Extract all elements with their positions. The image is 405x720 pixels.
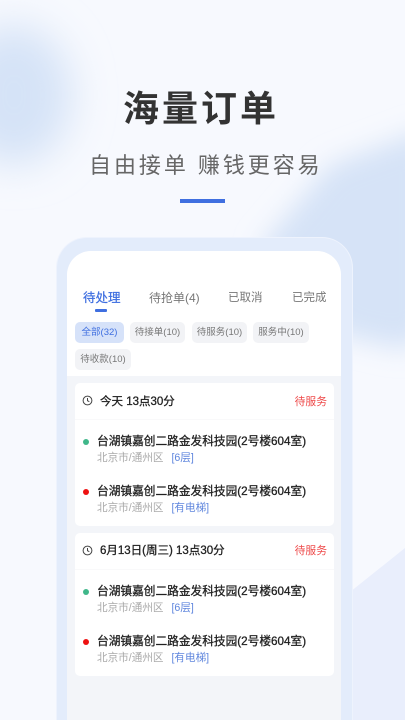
status: 待服务	[295, 545, 327, 557]
address 1: 北京市/通州区 [6层]	[97, 452, 194, 464]
address 2: 北京市/通州区 [有电梯]	[97, 502, 209, 514]
phone screen	[67, 251, 341, 720]
filter chip: all: 全部(32)	[82, 327, 117, 338]
status: 待服务	[295, 396, 327, 408]
filter chip: to serve	[192, 322, 247, 343]
subtitle: 自由接单 赚钱更容易	[89, 153, 323, 178]
clock icon	[82, 546, 92, 556]
filter chip: to accept	[130, 322, 185, 343]
header panel with tabs and filters	[67, 251, 341, 376]
phone frame	[57, 238, 352, 720]
tab: completed: 已完成	[292, 292, 326, 304]
address 2	[83, 484, 306, 514]
filter chip: in service: 服务中(10)	[258, 327, 304, 338]
filter chip: in service	[253, 322, 309, 343]
date and time: 今天 13点30分	[100, 396, 175, 408]
address 2: 北京市/通州区 [有电梯]	[97, 652, 209, 664]
address 2	[83, 634, 306, 664]
date and time: 6月13日(周三) 13点30分	[100, 545, 225, 557]
address 2: 台湖镇嘉创二路金发科技园(2号楼604室)	[97, 485, 306, 498]
address 2: 台湖镇嘉创二路金发科技园(2号楼604室)	[97, 635, 306, 648]
filter chip: to accept: 待接单(10)	[135, 327, 180, 338]
filter chip: to serve: 待服务(10)	[197, 327, 242, 338]
tab: pending: 待处理	[83, 291, 121, 305]
title accent bar	[180, 199, 225, 203]
filter chip: to collect: 待收款(10)	[80, 354, 126, 365]
filter chip: to collect	[75, 349, 131, 370]
tab: cancelled: 已取消	[228, 292, 262, 304]
order card 2	[75, 533, 334, 676]
title: 海量订单	[123, 88, 279, 129]
tab underline	[95, 309, 107, 312]
clock icon	[82, 396, 92, 406]
order card 1	[75, 383, 334, 526]
address 1	[83, 434, 306, 464]
address 1: 台湖镇嘉创二路金发科技园(2号楼604室)	[97, 435, 306, 448]
filter chip: all	[75, 322, 124, 343]
tab: grab orders: 待抢单(4)	[149, 291, 200, 305]
address 1: 北京市/通州区 [6层]	[97, 602, 194, 614]
address 1	[83, 584, 306, 614]
address 1: 台湖镇嘉创二路金发科技园(2号楼604室)	[97, 585, 306, 598]
